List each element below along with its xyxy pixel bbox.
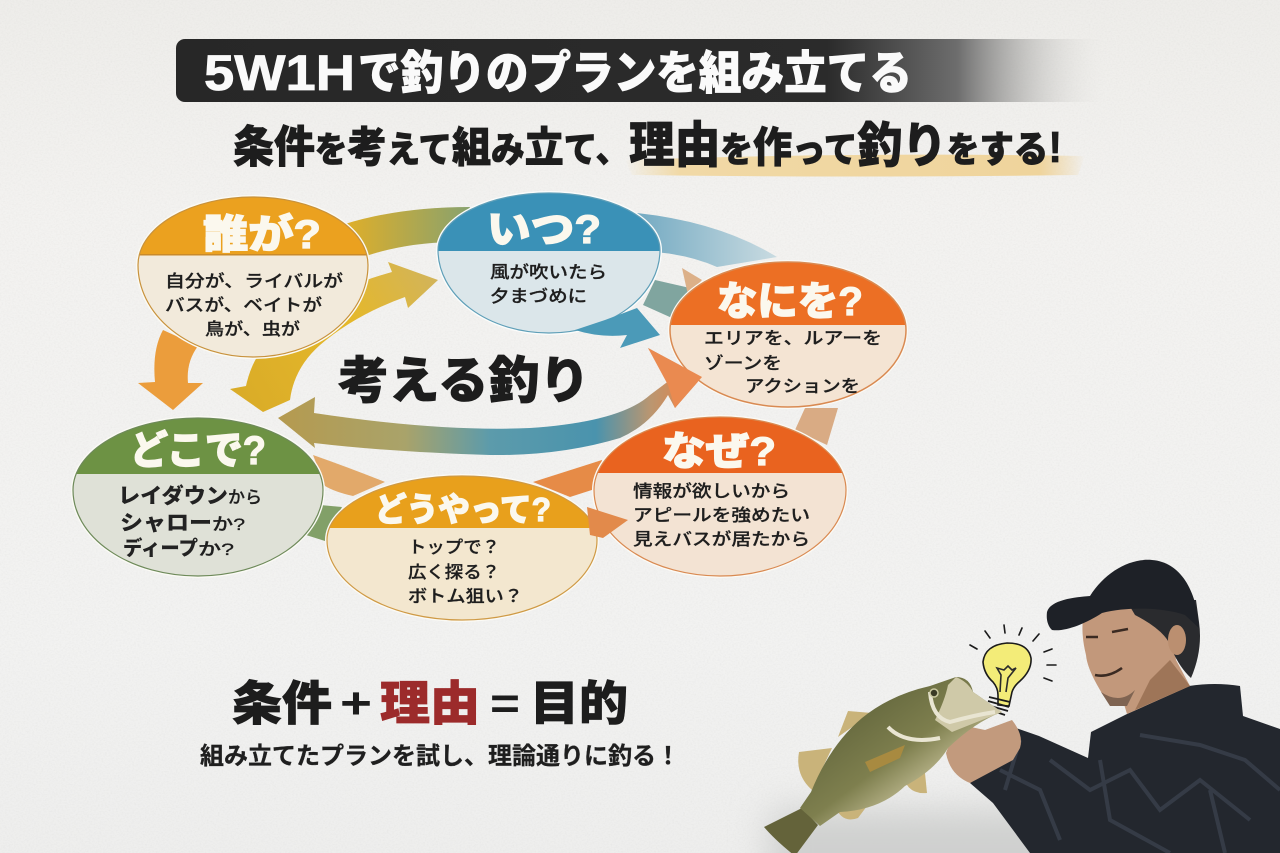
body: what: ゾーンを bbox=[704, 354, 782, 373]
heading: how: どうやって? bbox=[375, 491, 551, 528]
title bar: 5W1H bbox=[204, 45, 355, 101]
fish: head and jaw bbox=[935, 677, 1002, 732]
heading: why: なぜ? bbox=[662, 430, 776, 474]
body: where: から bbox=[228, 488, 262, 507]
arrow: when to what, middle band bbox=[643, 280, 690, 318]
icon: light bulb bbox=[970, 625, 1056, 715]
arrow: why to what bbox=[795, 408, 838, 445]
body: when bbox=[490, 262, 607, 306]
arrowheads overlapping the nodes bbox=[575, 308, 702, 538]
node: what bbox=[668, 260, 908, 409]
arrow: when to lower right, blue bbox=[575, 308, 660, 348]
arrowhead: tan bbox=[682, 268, 702, 295]
arrow: who to where bbox=[138, 330, 203, 410]
body: why: アピールを強めたい bbox=[633, 506, 810, 525]
body: when: 風が吹いたら bbox=[490, 262, 607, 282]
body: why: 情報が欲しいから bbox=[633, 481, 790, 501]
cycle arrows bbox=[138, 207, 838, 541]
body: how: ボトム狙い？ bbox=[408, 587, 523, 606]
body: where: か? bbox=[198, 540, 234, 559]
node: how bbox=[320, 470, 605, 625]
arrow: who to when bbox=[345, 207, 470, 256]
body: how bbox=[408, 538, 523, 606]
body: how: トップで？ bbox=[408, 538, 500, 557]
arrow: how to why bbox=[587, 507, 628, 538]
center label: 考える釣り bbox=[338, 353, 590, 409]
man: jacket bbox=[970, 684, 1280, 853]
body: when: 夕まづめに bbox=[490, 287, 587, 306]
body: who bbox=[165, 271, 343, 339]
body: why bbox=[633, 481, 810, 549]
body: where: か? bbox=[212, 515, 245, 534]
man: beard shadow bbox=[1101, 690, 1135, 706]
arrow: where to how, green bbox=[306, 505, 342, 541]
man: neck and face bbox=[1082, 600, 1190, 714]
man: neck shadow bbox=[1135, 660, 1190, 710]
heading: what: なにを? bbox=[717, 280, 863, 324]
man: hand bbox=[946, 720, 1021, 783]
fish: gill and belly detail bbox=[888, 692, 995, 740]
arrow: who to when and where, double headed bbox=[230, 262, 438, 412]
arrow: central loop bbox=[278, 348, 702, 455]
man: jacket folds bbox=[1000, 735, 1280, 853]
heading: where: どこで? bbox=[130, 429, 266, 473]
equation: + bbox=[340, 679, 372, 728]
body: where: レイダウン bbox=[118, 484, 228, 508]
arrow: how to where, tan bbox=[313, 455, 385, 496]
arrow: when to what, upper band bbox=[637, 213, 777, 267]
man: ear bbox=[1168, 625, 1186, 655]
fish: tail bbox=[764, 808, 818, 853]
title bar: で釣りのプランを組み立てる bbox=[358, 47, 912, 99]
heading: when: いつ? bbox=[487, 208, 601, 252]
body: who: 鳥が、虫が bbox=[205, 319, 300, 339]
equation: = bbox=[490, 679, 520, 728]
body: who: 自分が、ライバルが bbox=[165, 271, 343, 291]
photo: man holding bass bbox=[764, 560, 1280, 853]
body: where: シャロー bbox=[120, 512, 212, 535]
body: what: エリアを、ルアーを bbox=[704, 329, 882, 348]
conclusion text: 組み立てたプランを試し、理論通りに釣る！ bbox=[200, 743, 680, 770]
body: what bbox=[704, 329, 882, 396]
body: what: アクションを bbox=[745, 377, 860, 396]
node: when bbox=[430, 190, 670, 340]
heading: who: 誰が? bbox=[203, 212, 321, 257]
fish: pectoral fin bbox=[865, 745, 905, 772]
fish: fins bbox=[798, 711, 927, 820]
body: where bbox=[118, 484, 262, 560]
title bar bbox=[176, 39, 1106, 102]
body: where: ディープ bbox=[123, 536, 198, 560]
man: cap bbox=[1047, 560, 1199, 630]
node: where bbox=[71, 416, 325, 578]
body: who: バスが、ベイトが bbox=[165, 295, 322, 315]
node: who bbox=[136, 195, 370, 359]
equation: 目的 bbox=[530, 677, 628, 730]
arrowhead: central loop into what bbox=[648, 348, 702, 408]
equation: 条件 bbox=[232, 677, 332, 730]
man: smile and eyes bbox=[1086, 629, 1128, 676]
body: how: 広く探る？ bbox=[408, 563, 500, 582]
fish: body bbox=[800, 677, 1002, 826]
equation: 理由 bbox=[380, 677, 480, 730]
man: hair bbox=[1125, 598, 1200, 678]
arrow: why to how bbox=[533, 460, 602, 497]
body: why: 見えバスが居たから bbox=[633, 529, 810, 549]
equation bbox=[232, 677, 628, 730]
fish: eye bbox=[930, 689, 938, 697]
node: why bbox=[592, 415, 848, 578]
subtitle with highlight: 条件を考えて組み立て、理由を作って釣りをする! bbox=[233, 119, 1062, 173]
